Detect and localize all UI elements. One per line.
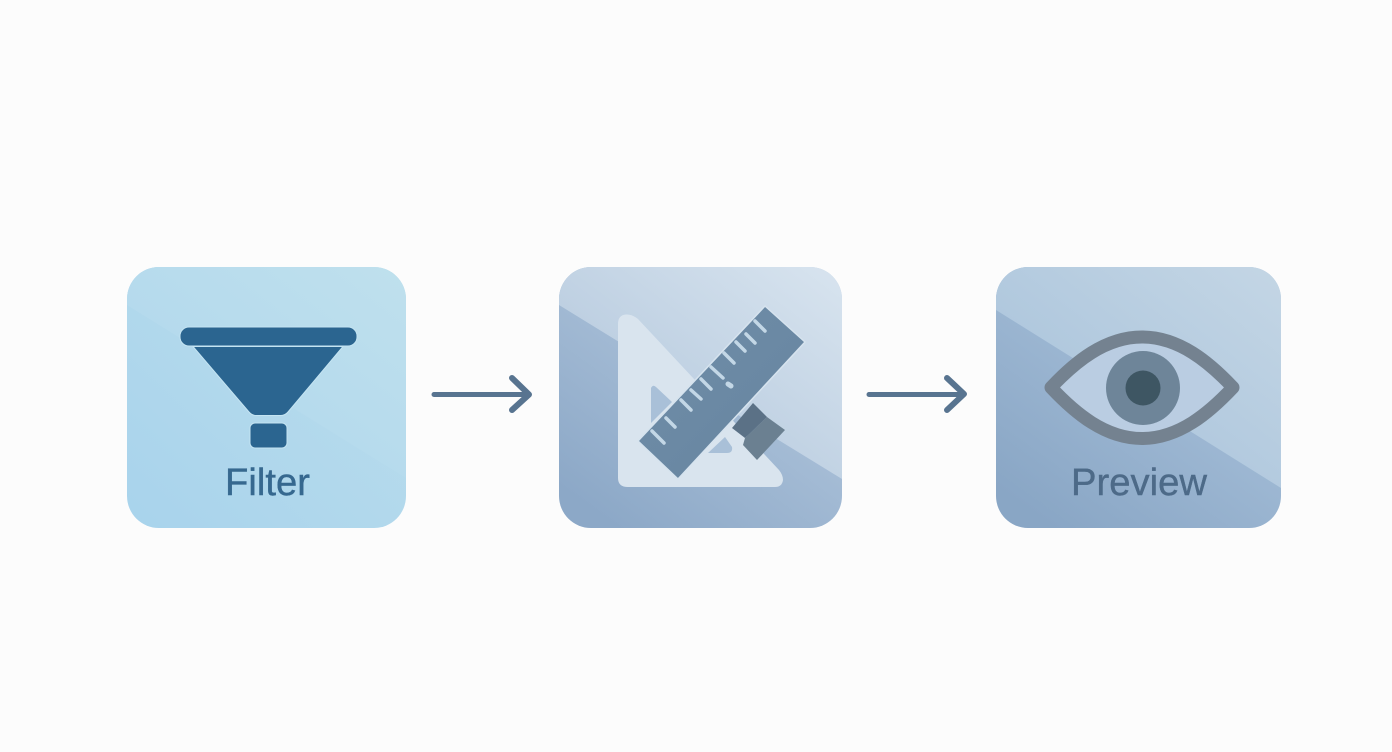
icon: eye — [1051, 337, 1233, 438]
eye pupil — [1126, 370, 1160, 406]
label: filter: Filter — [225, 462, 310, 504]
arrow: filter to measure — [434, 378, 529, 410]
card: preview — [996, 267, 1281, 528]
ruler tick marks — [652, 321, 765, 443]
eye iris — [1106, 351, 1180, 425]
icon: eraser block — [732, 403, 785, 460]
card: filter — [127, 267, 406, 528]
label: preview: Preview — [1071, 462, 1208, 504]
card: measure — [559, 267, 842, 528]
icon: funnel — [180, 327, 357, 448]
icon: set square — [618, 314, 783, 487]
icon: ruler — [638, 306, 805, 479]
process flow diagram — [127, 267, 1281, 528]
arrow: measure to preview — [869, 378, 964, 410]
